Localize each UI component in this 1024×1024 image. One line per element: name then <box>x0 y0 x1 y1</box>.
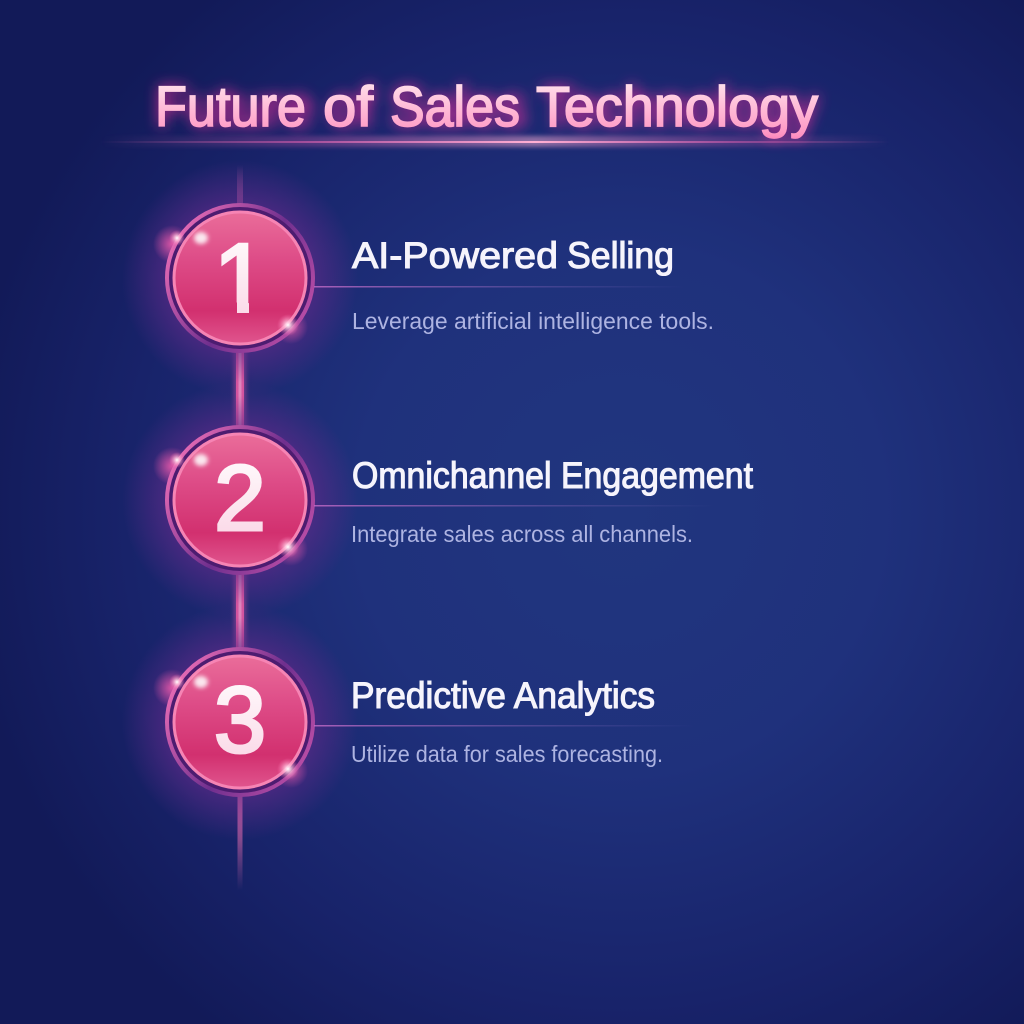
step 3 badge <box>122 604 358 840</box>
step 2 text <box>314 455 754 547</box>
step 2 badge <box>122 382 358 618</box>
title: Sales <box>390 75 520 139</box>
heading 2: Omnichannel Engagement <box>352 455 754 496</box>
description 1: Leverage artificial intelligence tools. <box>352 308 714 334</box>
step 3 text <box>314 675 694 767</box>
rule 1 <box>314 286 684 288</box>
heading 1: AI-Powered <box>352 235 558 276</box>
rule 2 <box>314 505 714 506</box>
title: Technology <box>536 75 818 139</box>
step 1 badge <box>130 168 350 392</box>
title underline <box>100 136 890 147</box>
heading 3: Predictive Analytics <box>351 675 655 716</box>
rule 3 <box>314 725 694 726</box>
title: Future of Sales Technology <box>155 75 818 139</box>
heading 1 second word: Selling <box>567 235 674 276</box>
number 1: 1 <box>214 223 268 333</box>
number 3: 3 <box>214 667 266 772</box>
timeline connector <box>234 165 246 890</box>
title: of <box>323 75 373 139</box>
description 3: Utilize data for sales forecasting. <box>351 741 663 767</box>
step 1 text <box>314 235 714 334</box>
title: Future <box>155 75 306 139</box>
description 2: Integrate sales across all channels. <box>351 521 693 547</box>
number 2: 2 <box>214 446 266 550</box>
